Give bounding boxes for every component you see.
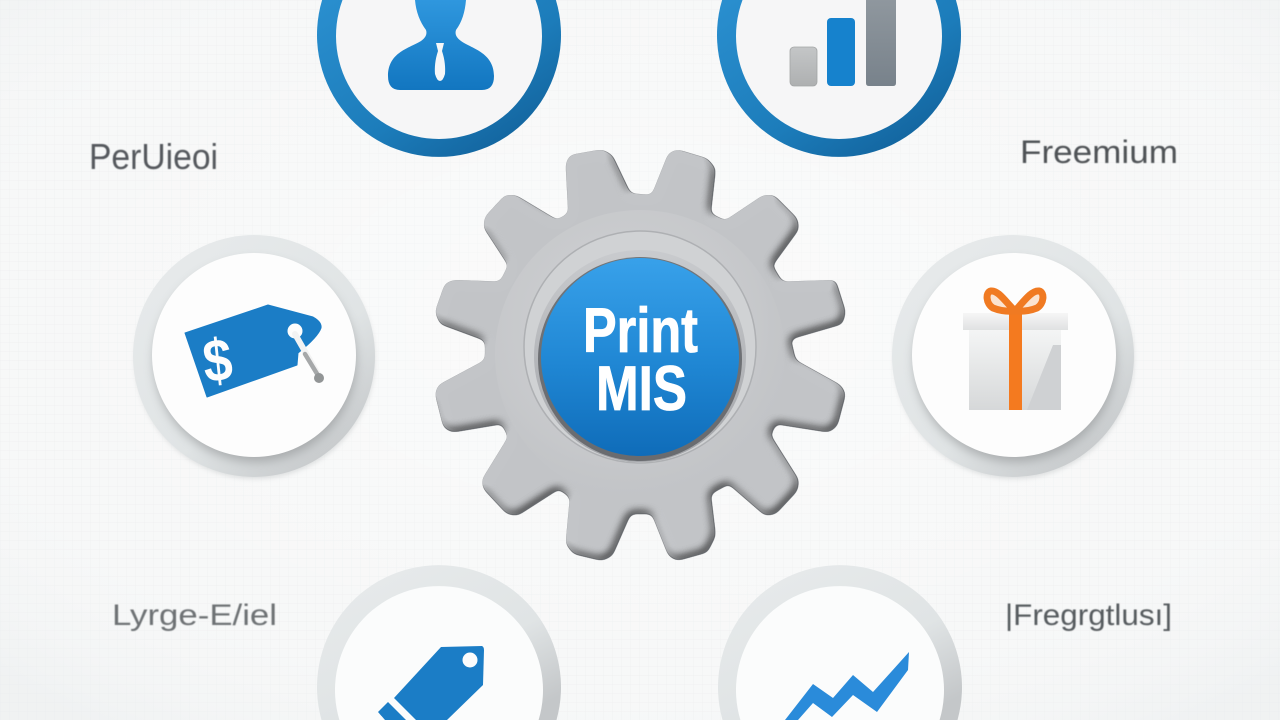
icon: dollar price tag <box>185 305 324 397</box>
icon: blue tag <box>378 646 484 720</box>
gear body <box>435 149 845 560</box>
panel: top-right circle with bar chart icon <box>717 0 961 157</box>
icon: bar chart <box>790 0 896 86</box>
icon: dollar price tag: $ <box>200 326 235 395</box>
label: bottom-right: |Fregrgtlusı] <box>1005 599 1172 632</box>
gear label: Print <box>583 296 698 366</box>
panel: bottom-right circle with trend line icon <box>718 565 962 720</box>
icon: business person <box>388 0 494 90</box>
label: bottom-left: Lyrge-E/iel <box>112 599 277 632</box>
gear label: MIS <box>596 354 687 424</box>
icon: rising trend line <box>785 652 909 720</box>
panel: left circle with price tag icon <box>133 235 375 479</box>
central gear <box>435 149 845 560</box>
panel: top-left circle with person icon <box>317 0 561 157</box>
icon: gift box <box>963 291 1068 410</box>
label: top-left: PerUieoi <box>89 136 218 177</box>
panel: right circle with gift icon <box>892 235 1134 479</box>
label: top-right: Freemium <box>1020 134 1178 170</box>
gear label <box>583 296 698 424</box>
gear hub <box>524 231 756 463</box>
panel: bottom-left circle with tag icon <box>317 565 561 720</box>
